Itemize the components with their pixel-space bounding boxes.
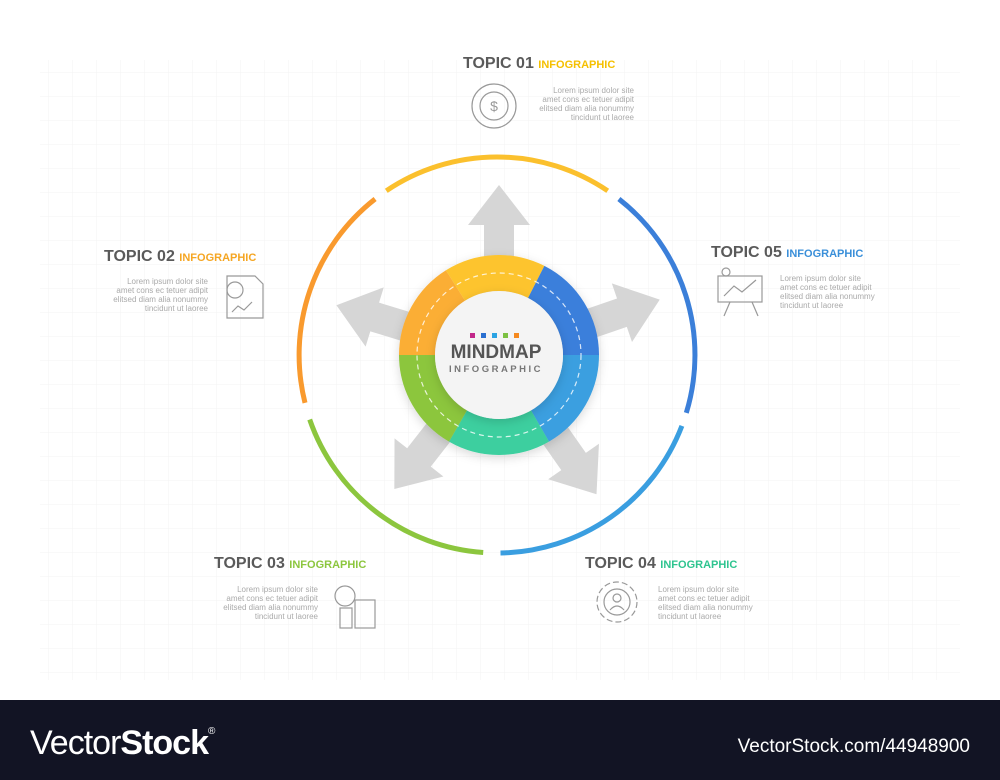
topic 05: amet cons ec tetuer adipit — [780, 283, 872, 292]
center circle: MINDMAP — [451, 342, 542, 363]
footer: VectorStock — [30, 724, 208, 762]
topic 01: $ — [490, 98, 498, 114]
topic 01: Lorem ipsum dolor site — [553, 86, 635, 95]
topic 04: elitsed diam alia nonummy — [658, 603, 753, 612]
topic 05: tincidunt ut laoree — [780, 301, 844, 310]
topic 04: TOPIC 04 INFOGRAPHIC — [585, 555, 737, 572]
donut — [417, 273, 581, 437]
topic 02: tincidunt ut laoree — [145, 304, 209, 313]
topic 02: elitsed diam alia nonummy — [113, 295, 208, 304]
topic 01: elitsed diam alia nonummy — [539, 104, 634, 113]
topic 03: tincidunt ut laoree — [255, 612, 319, 621]
topic 02: TOPIC 02 INFOGRAPHIC — [104, 248, 256, 265]
topic 02: amet cons ec tetuer adipit — [116, 286, 209, 295]
topic 05 — [711, 244, 875, 316]
topic 01 — [463, 55, 635, 128]
arrows — [327, 185, 670, 512]
center circle — [435, 291, 563, 419]
topic 03: elitsed diam alia nonummy — [223, 603, 318, 612]
topic 04 — [585, 555, 753, 622]
center circle: INFOGRAPHIC — [449, 364, 543, 375]
footer: ® — [208, 726, 216, 737]
topic 05: TOPIC 05 INFOGRAPHIC — [711, 244, 863, 261]
footer: VectorStock.com/44948900 — [738, 736, 970, 757]
topic 03: Lorem ipsum dolor site — [237, 585, 319, 594]
topic 05: elitsed diam alia nonummy — [780, 292, 875, 301]
topic 02: Lorem ipsum dolor site — [127, 277, 209, 286]
topic 03 — [214, 555, 375, 628]
topic 01: tincidunt ut laoree — [571, 113, 635, 122]
topic 04: tincidunt ut laoree — [658, 612, 722, 621]
topic 04: amet cons ec tetuer adipit — [658, 594, 750, 603]
topic 02 — [104, 248, 263, 318]
topic 01: TOPIC 01 INFOGRAPHIC — [463, 55, 615, 72]
topic 03: amet cons ec tetuer adipit — [226, 594, 319, 603]
topic 04: Lorem ipsum dolor site — [658, 585, 739, 594]
footer — [0, 700, 1000, 780]
outer ring — [299, 157, 695, 553]
topic 03: TOPIC 03 INFOGRAPHIC — [214, 555, 366, 572]
topic 01: amet cons ec tetuer adipit — [542, 95, 635, 104]
topic 05: Lorem ipsum dolor site — [780, 274, 861, 283]
